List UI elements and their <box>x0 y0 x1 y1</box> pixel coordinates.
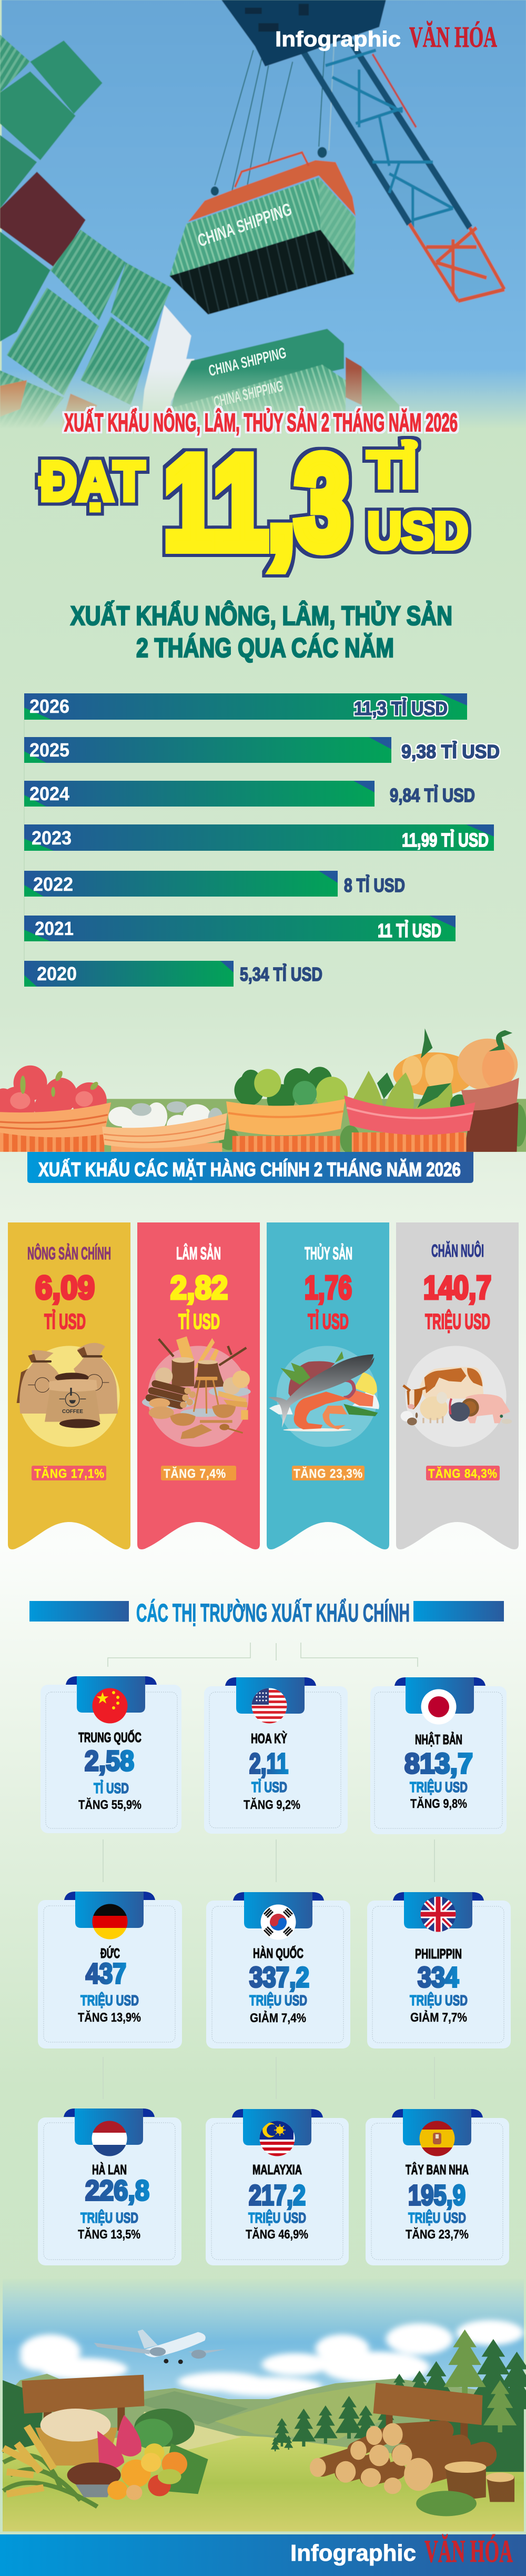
pumpkins <box>393 1052 476 1096</box>
footer band <box>0 2534 526 2576</box>
plane <box>143 2332 206 2358</box>
market card: Philippines: GIẢM 7,7% <box>410 2010 467 2025</box>
flag: South Korea <box>260 1904 296 1940</box>
market card: Japan: TRIỆU USD <box>410 1779 468 1795</box>
panel: aquatic products <box>267 1222 389 1549</box>
market card: South Korea <box>206 1892 350 2048</box>
panel: main agricultural products: 6,09 <box>35 1270 95 1306</box>
market card: United States: TĂNG 9,2% <box>244 1797 300 1812</box>
panel: aquatic products: TỈ USD <box>308 1309 349 1334</box>
market card: China: 2,58 <box>85 1745 134 1777</box>
bar 2023 <box>24 824 494 851</box>
panel: aquatic products: THỦY SẢN <box>305 1244 352 1263</box>
icon: coffee sacks: COFFEE <box>62 1409 83 1415</box>
bar 2024 <box>24 781 475 807</box>
bar 2026: 11,3 TỈ USD <box>354 698 448 719</box>
market card: China: TỈ USD <box>94 1779 129 1796</box>
market card: United States <box>204 1677 348 1834</box>
panel: livestock: 140,7 <box>423 1270 491 1306</box>
bar 2021: 11 TỈ USD <box>378 920 441 941</box>
market card: Netherlands: 226,8 <box>85 2175 149 2206</box>
icon: fish and seafood <box>268 1346 379 1447</box>
basket rims and bodies <box>0 1132 104 1152</box>
market card: United States: TỈ USD <box>251 1778 287 1795</box>
market card: South Korea: 337,2 <box>249 1962 309 1993</box>
right sign <box>386 2412 468 2443</box>
bar 2022: 2022 <box>33 873 73 895</box>
bar chart: exports by year <box>24 693 500 987</box>
trees <box>3 2339 526 2472</box>
market card: China: TRUNG QUỐC <box>78 1729 141 1745</box>
market card: Japan: TĂNG 9,8% <box>410 1796 467 1811</box>
container lettering: CHINA SHIPPING <box>196 198 294 251</box>
top logo <box>275 21 497 54</box>
panel: aquatic products: 1,76 <box>305 1270 352 1306</box>
market card: China: TĂNG 55,9% <box>78 1797 141 1812</box>
container lettering: CHINA SHIPPING <box>207 344 288 380</box>
bar 2025: 9,38 TỈ USD <box>401 741 500 762</box>
panel: main agricultural products <box>8 1222 130 1549</box>
bar 2025: 2025 <box>29 739 69 761</box>
bar 2021: 2021 <box>35 918 74 939</box>
bar 2022: 8 TỈ USD <box>344 874 405 896</box>
bar 2020: 5,34 TỈ USD <box>240 963 322 985</box>
illustration: rural landscape with plane, produce and timber <box>3 2279 526 2531</box>
market card: Spain: TÂY BAN NHA <box>406 2162 469 2177</box>
market card: Philippines: 334 <box>418 1962 459 1993</box>
flag: United Kingdom <box>420 1896 456 1932</box>
market card: China <box>41 1676 181 1833</box>
rice basket <box>35 2428 117 2465</box>
flag: Spain <box>419 2121 455 2156</box>
market card: Philippines: PHILIPPIN <box>415 1946 462 1962</box>
market card: Spain: TRIỆU USD <box>408 2210 466 2226</box>
panel: forestry products: TỈ USD <box>178 1309 220 1334</box>
market card: Netherlands: TRIỆU USD <box>80 2210 138 2226</box>
market card: Malaysia: 217,2 <box>249 2180 306 2211</box>
flag: Netherlands <box>92 2121 127 2156</box>
market card: Japan: NHẬT BẢN <box>415 1732 462 1747</box>
market card: Germany: TRIỆU USD <box>80 1992 139 2008</box>
market card: Netherlands: TĂNG 13,5% <box>78 2227 140 2242</box>
bar 2024: 2024 <box>29 783 69 804</box>
heading: exports over the years <box>70 600 452 663</box>
market card: Spain: TĂNG 23,7% <box>406 2227 469 2242</box>
market card: Germany <box>38 1892 182 2048</box>
market card: South Korea: GIẢM 7,4% <box>250 2010 306 2025</box>
logs <box>322 2431 483 2476</box>
container lettering <box>196 198 294 411</box>
panel: main agricultural products: NÔNG SẢN CHÍNH <box>27 1243 111 1263</box>
eggs <box>108 1102 211 1136</box>
bar 2020: 2020 <box>37 963 77 984</box>
flag: Japan <box>421 1689 457 1725</box>
headline figure: đạt 11,3 tỉ USD <box>40 429 468 576</box>
bar 2020 <box>24 961 322 987</box>
market card: United States: HOA KỲ <box>251 1730 287 1746</box>
headline figure: đạt 11,3 tỉ USD: ĐẠT <box>40 451 145 512</box>
market card: Spain <box>366 2109 509 2265</box>
bar 2023: 2023 <box>32 827 72 849</box>
market card: Germany: 437 <box>86 1958 126 1990</box>
market card: Philippines <box>367 1892 511 2048</box>
hero photo: container being lifted by crane <box>0 0 526 429</box>
panel: forestry products: LÂM SẢN <box>176 1244 221 1263</box>
illustration: fruit baskets <box>0 1028 526 1153</box>
flag: Malaysia <box>259 2121 295 2156</box>
left sign <box>44 2405 125 2431</box>
tag: change: TĂNG 7,4% <box>164 1466 226 1481</box>
section banner: main export commodities <box>27 1152 473 1183</box>
market card: Malaysia: MALAYXIA <box>252 2162 302 2177</box>
panel: forestry products: 2,82 <box>170 1270 228 1306</box>
headline figure: đạt 11,3 tỉ USD: USD <box>367 502 468 560</box>
panel: livestock <box>396 1222 519 1549</box>
top logo: Infographic <box>275 27 401 51</box>
market card: South Korea: TRIỆU USD <box>249 1992 307 2008</box>
market card: United States: 2,11 <box>249 1748 288 1779</box>
market card: Germany: ĐỨC <box>100 1945 120 1961</box>
pears <box>347 1071 453 1115</box>
fruit <box>161 2443 208 2494</box>
flag: USA <box>251 1688 287 1724</box>
hero fade into background <box>0 369 526 429</box>
market card: Netherlands: HÀ LAN <box>92 2162 127 2177</box>
market card: Japan: 813,7 <box>404 1748 473 1779</box>
market card: Malaysia: TRIỆU USD <box>248 2210 306 2226</box>
bar 2022 <box>24 871 405 897</box>
bar 2024: 9,84 TỈ USD <box>390 784 475 806</box>
footer band: Infographic <box>290 2540 416 2566</box>
icon: timber and wood products <box>142 1336 251 1447</box>
market card: Malaysia: TĂNG 46,9% <box>246 2227 308 2242</box>
headline figure: đạt 11,3 tỉ USD: TỈ <box>367 441 417 499</box>
market card: Philippines: TRIỆU USD <box>410 1992 468 2008</box>
apples <box>0 1066 107 1126</box>
bar 2025 <box>24 737 500 763</box>
headline figure: đạt 11,3 tỉ USD: 11,3 <box>164 429 350 576</box>
bar 2026 <box>24 693 467 720</box>
tag: change: TĂNG 17,1% <box>34 1466 105 1481</box>
bar 2026: 2026 <box>29 695 69 717</box>
tag: change: TĂNG 23,3% <box>294 1466 363 1481</box>
container lettering: CHINA SHIPPING <box>212 377 285 411</box>
heading: exports over the years: 2 THÁNG QUA CÁC NĂM <box>136 633 394 663</box>
panel: forestry products <box>137 1222 260 1549</box>
market card: Spain: 195,9 <box>408 2180 466 2211</box>
market card: Netherlands <box>38 2108 181 2265</box>
flag: China <box>92 1688 128 1724</box>
bar 2023: 11,99 TỈ USD <box>402 829 489 851</box>
market card: Japan <box>370 1677 507 1834</box>
green fruit <box>234 1067 332 1113</box>
panel: main agricultural products: TỈ USD <box>44 1309 86 1334</box>
market card: Malaysia <box>206 2109 349 2265</box>
icon: coffee sacks <box>17 1343 120 1447</box>
bar 2021 <box>24 916 456 941</box>
market card: South Korea: HÀN QUỐC <box>253 1945 304 1961</box>
market card: Germany: TĂNG 13,9% <box>78 2010 141 2025</box>
tag: change: TĂNG 84,3% <box>428 1466 498 1481</box>
icon: farm animals <box>401 1346 512 1447</box>
flag: Germany <box>92 1904 128 1940</box>
